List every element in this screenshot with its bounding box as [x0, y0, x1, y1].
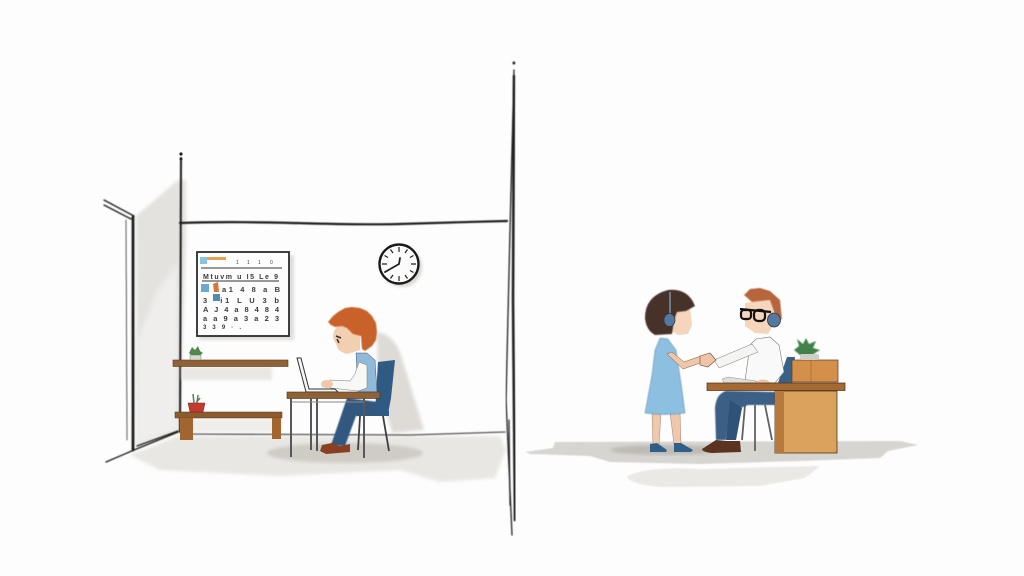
lower floor wash: [627, 466, 820, 487]
center divider line: [506, 62, 515, 535]
man glasses: [740, 309, 771, 321]
man face: [745, 300, 775, 334]
laptop: [297, 358, 338, 392]
desk plant: [794, 338, 820, 360]
shelf plant: [189, 346, 203, 356]
man pants: [715, 391, 775, 440]
boy head: [333, 324, 360, 354]
calendar text rows: a a 9 a 3 a 2 3: [203, 314, 279, 323]
person: girl: [645, 290, 703, 452]
calendar header: [200, 257, 207, 264]
calendar text rows: Mtuvm u I5 Le 9: [203, 274, 278, 281]
boy hands: [321, 380, 333, 388]
calendar board: [197, 252, 289, 336]
man hands and handshake: [700, 353, 716, 367]
boy shoes: [320, 443, 350, 454]
man shoes: [702, 440, 741, 453]
bench shadow: [185, 419, 280, 432]
wall top finial: [179, 152, 183, 160]
girl headphones: [669, 292, 671, 314]
floor shadow: [610, 445, 720, 455]
desk: [287, 392, 380, 458]
clock face: [380, 244, 418, 284]
man hair: [744, 288, 782, 320]
man headphones: [768, 313, 780, 327]
man arm: [714, 344, 758, 368]
calendar text rows: a1 4 8 a B: [222, 285, 281, 294]
man torso: [745, 337, 784, 383]
panel: right scene: [525, 288, 918, 487]
clock shadow: [382, 247, 422, 287]
boy vest: [356, 353, 377, 392]
girl dress: [645, 338, 685, 414]
chair: [742, 357, 795, 451]
side wall wash: [136, 180, 186, 447]
red pot: [188, 403, 205, 412]
calendar: 1: [247, 260, 250, 266]
papers on desk: [722, 377, 756, 383]
shelf shadow: [182, 367, 272, 380]
clock hands: [385, 258, 400, 272]
calendar highlights: [201, 284, 209, 292]
girl face: [670, 308, 692, 335]
man forearm on desk: [757, 380, 769, 384]
calendar: [197, 252, 294, 340]
boy hair: [328, 307, 377, 351]
floor wash: [130, 436, 506, 482]
girl legs: [652, 413, 681, 444]
calendar text rows: 3 ·i1 L U 3 b: [203, 296, 279, 305]
calendar: 0: [270, 260, 273, 266]
wall lines: [104, 158, 507, 462]
box on desk: [792, 360, 838, 382]
person: man: [700, 288, 784, 453]
calendar: 1: [236, 260, 239, 266]
bench: [175, 394, 282, 440]
boy eye: [336, 336, 341, 343]
girl hair: [645, 290, 695, 335]
floor wash: [525, 441, 918, 464]
girl arm: [667, 352, 703, 369]
calendar text rows: 3 3 9 · .: [203, 325, 241, 331]
desk: [707, 383, 845, 453]
panel: left room: [104, 152, 507, 482]
calendar text rows: A J 4 a 8 4 8 4: [203, 305, 280, 314]
person wall shadow: [377, 332, 424, 433]
side wall light patch: [137, 262, 178, 446]
person: boy at laptop: [320, 307, 378, 454]
girl shoes: [650, 443, 693, 452]
calendar: 1: [258, 260, 261, 266]
clock: [380, 244, 422, 287]
chair: [357, 360, 395, 451]
boy sleeve: [330, 362, 367, 391]
boy pants: [331, 398, 378, 446]
upper shelf: [173, 346, 288, 380]
calendar shadow: [199, 255, 294, 340]
floor shadow under desk: [267, 443, 423, 463]
calendar text rows: [203, 274, 281, 331]
